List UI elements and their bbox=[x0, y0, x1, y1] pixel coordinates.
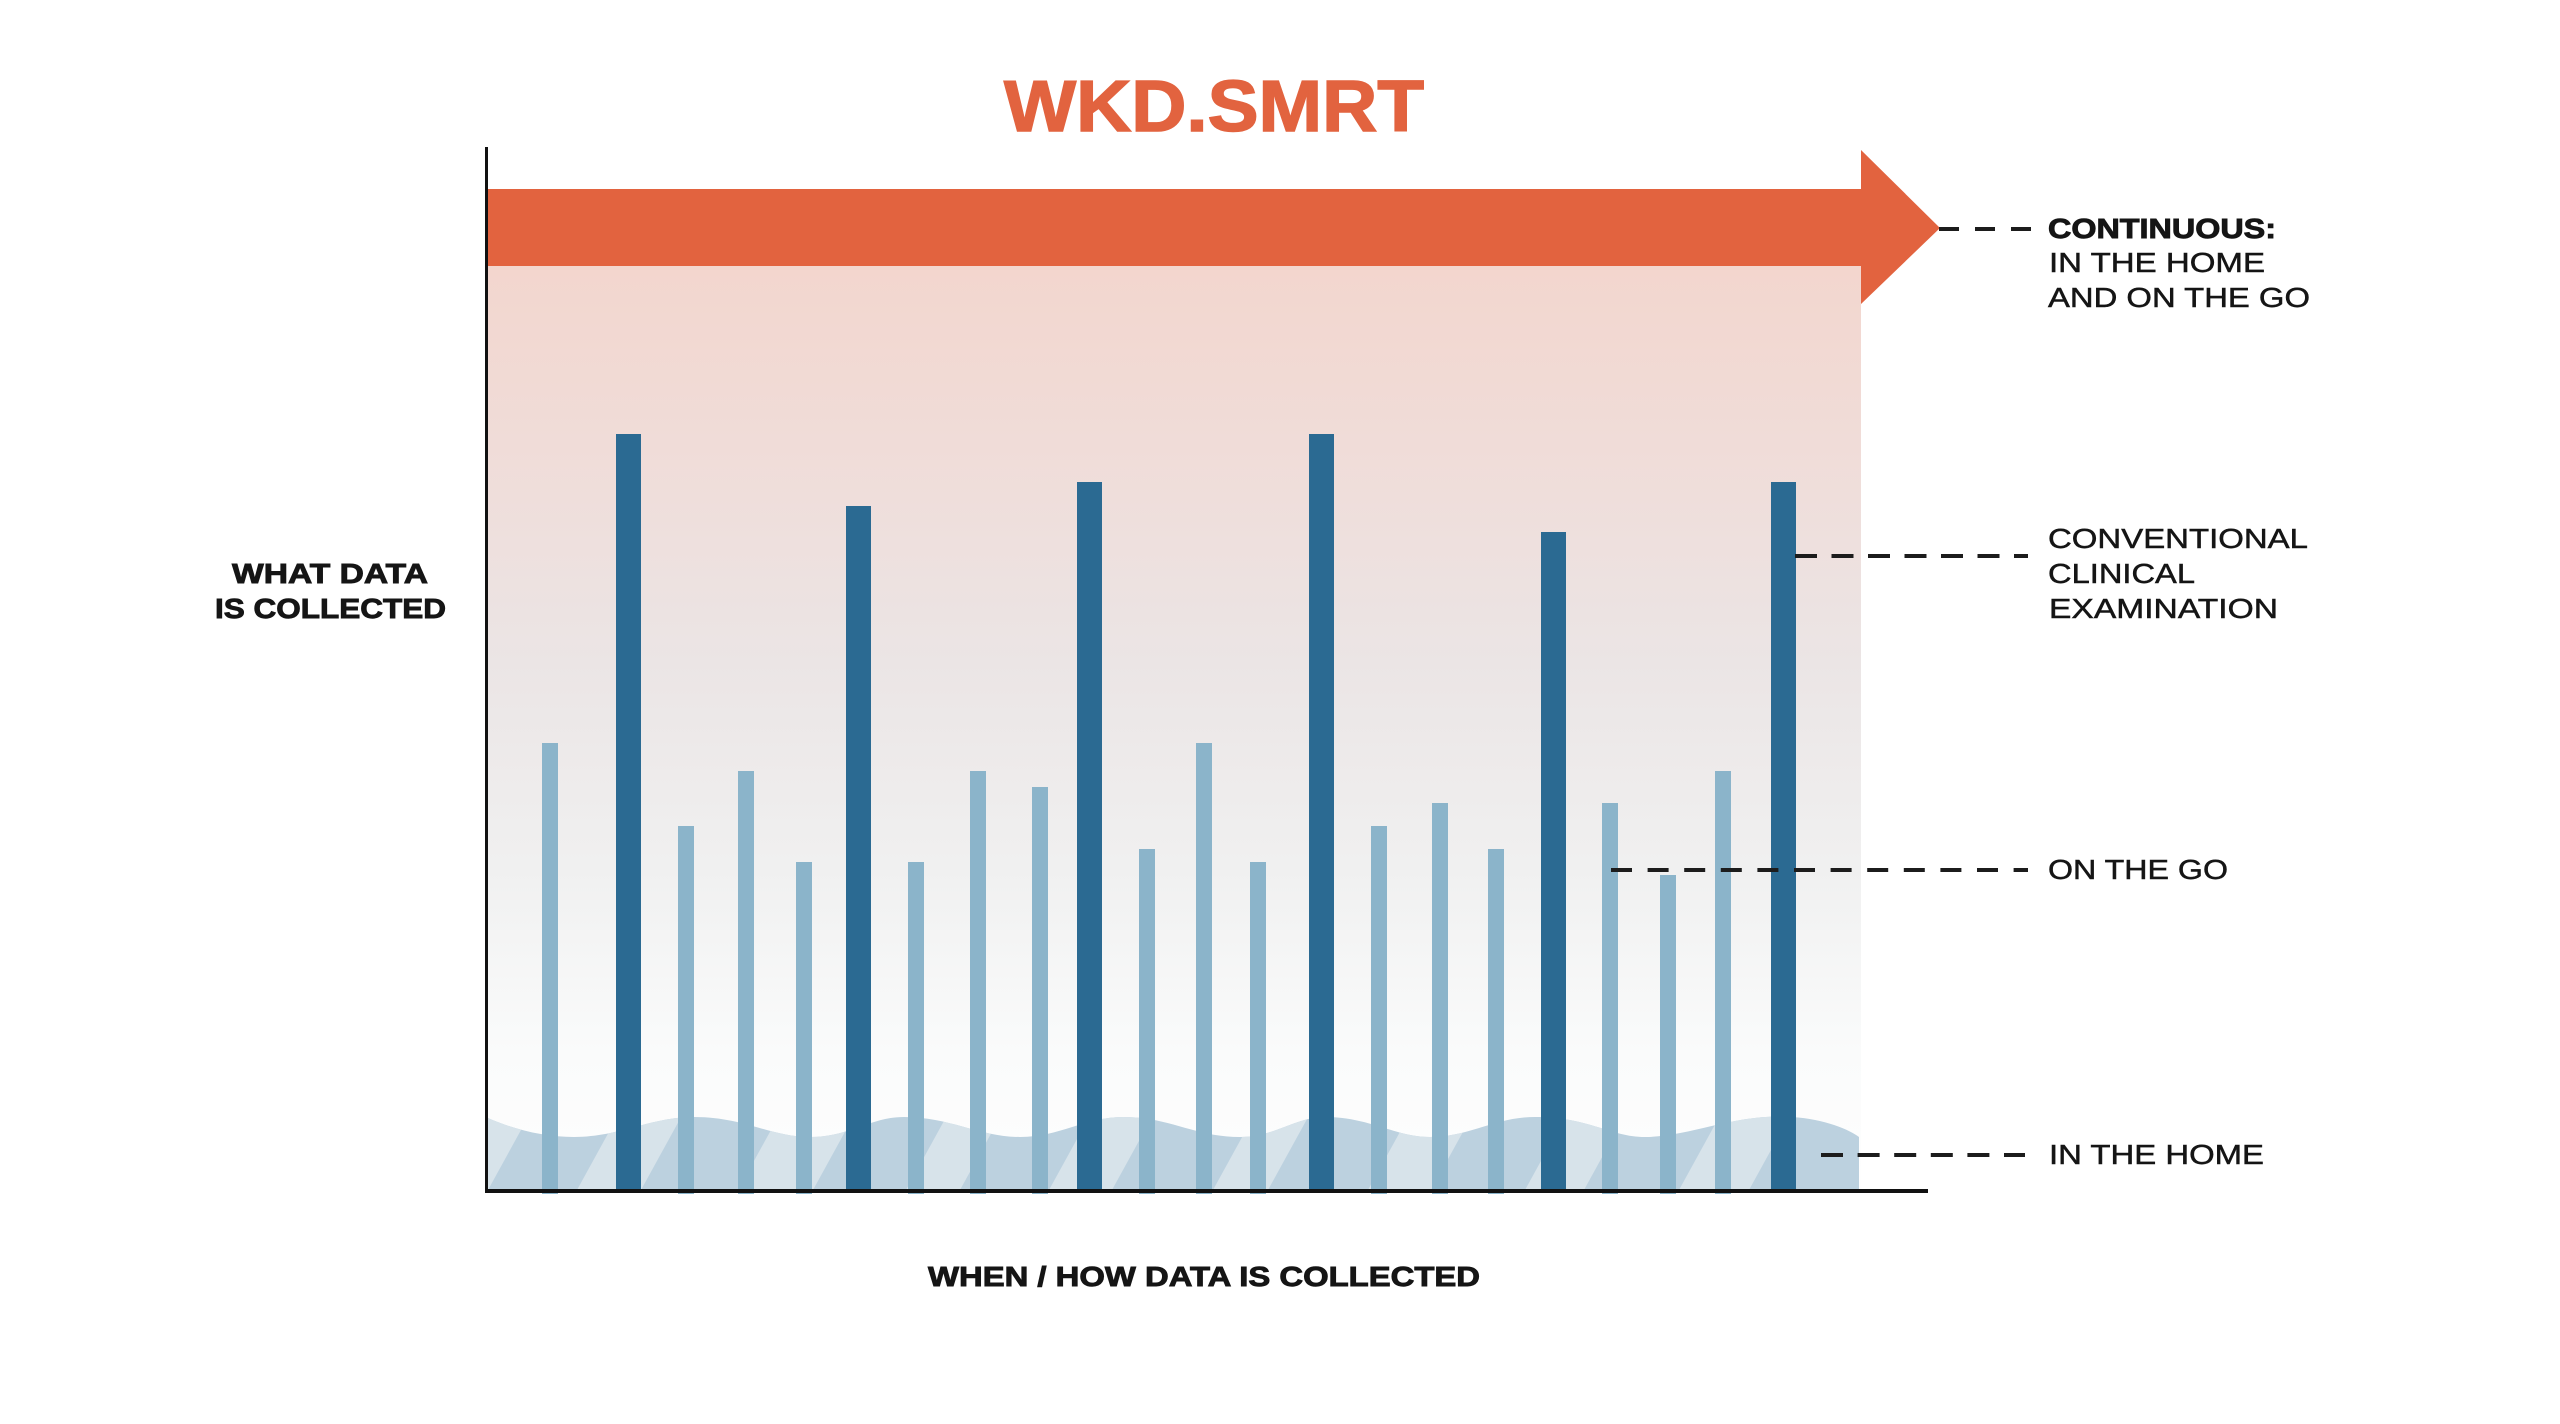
callout: conventional clinical examination bbox=[2048, 523, 2308, 624]
conventional clinical examination bars bbox=[616, 434, 1796, 1191]
leader: continuous bbox=[1939, 227, 2031, 231]
callout: continuous: IN THE HOME bbox=[2049, 247, 2265, 278]
y-axis label: WHAT DATA bbox=[232, 558, 428, 589]
callout: conventional clinical examination: EXAMINATION bbox=[2049, 593, 2278, 624]
leader: in the home bbox=[1821, 1153, 2025, 1157]
continuous arrow bbox=[486, 150, 1940, 304]
callout: conventional clinical examination: CONVENTIONAL bbox=[2048, 523, 2308, 554]
title: WKD.SMRT bbox=[1004, 67, 1424, 147]
in-the-home wave area bbox=[488, 1116, 1859, 1189]
y-axis label: IS COLLECTED bbox=[215, 593, 446, 624]
callout: in the home: IN THE HOME bbox=[2049, 1139, 2264, 1170]
leader: conventional bbox=[1795, 554, 2028, 558]
callout: continuous: CONTINUOUS: bbox=[2048, 213, 2276, 244]
callout: on the go: ON THE GO bbox=[2048, 854, 2228, 885]
axes bbox=[485, 147, 1928, 1193]
leader: on the go bbox=[1611, 868, 2028, 872]
callout: continuous bbox=[2048, 213, 2310, 313]
y-axis label bbox=[215, 558, 446, 624]
callout: continuous: AND ON THE GO bbox=[2048, 282, 2310, 313]
x-axis label: WHEN / HOW DATA IS COLLECTED bbox=[928, 1261, 1480, 1292]
on-the-go bars bbox=[542, 743, 1731, 1194]
callout: conventional clinical examination: CLINICAL bbox=[2048, 558, 2195, 589]
gradient data field bbox=[487, 266, 1861, 1191]
infographic canvas bbox=[216, 79, 2309, 1288]
